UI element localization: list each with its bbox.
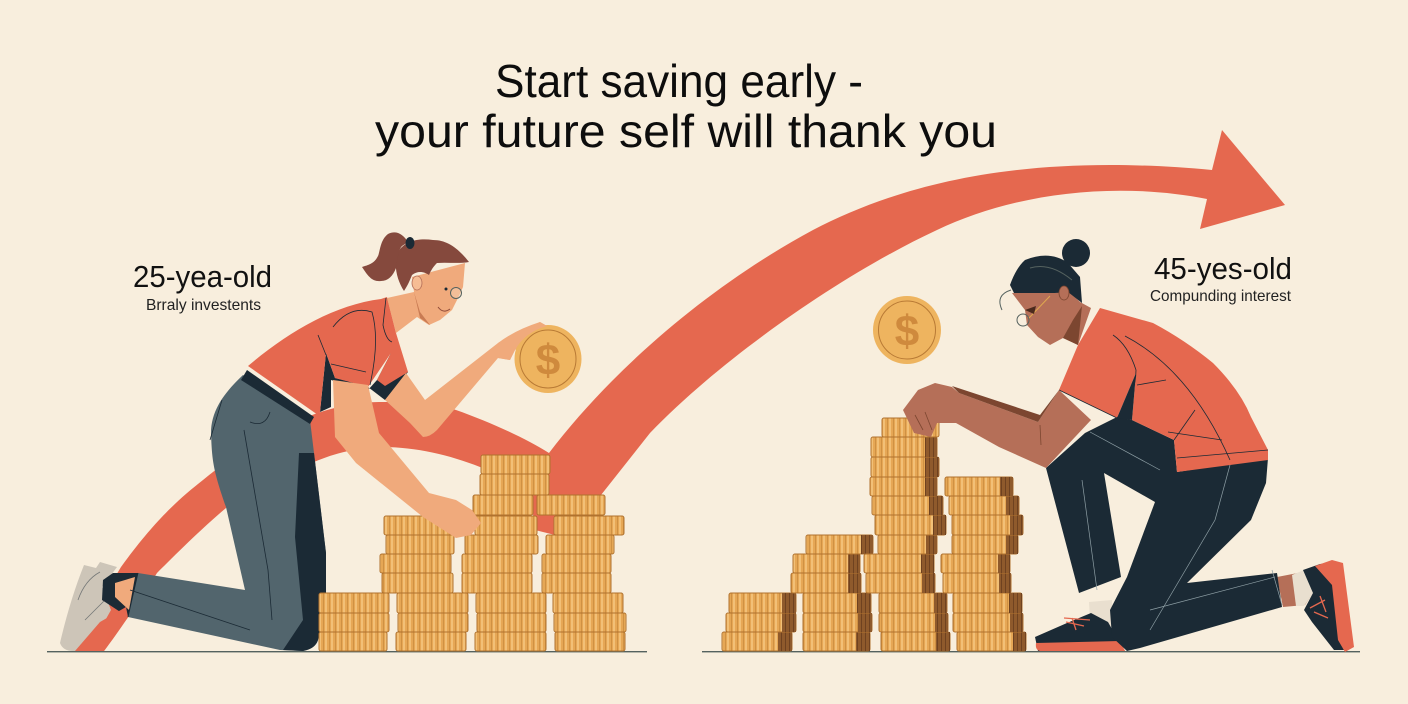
- ground line right: [702, 651, 1360, 652]
- coin stacks right: [722, 418, 1026, 651]
- arm and hands: [903, 383, 1091, 468]
- label: 45-year-old: 45-yes-old: [1154, 251, 1292, 286]
- belt: [241, 370, 314, 424]
- back shoe: [60, 562, 138, 651]
- head: [362, 232, 469, 333]
- jeans: [128, 375, 326, 651]
- ground line left: [47, 651, 647, 652]
- growth arrow: [75, 130, 1285, 651]
- coin held by young saver: [514, 325, 582, 393]
- shirt: [248, 297, 408, 415]
- label: 25-year-old: 25-yea-old: [133, 259, 272, 294]
- coin held by young saver: $: [536, 336, 560, 385]
- trousers: [1046, 417, 1282, 651]
- head: [1000, 239, 1091, 345]
- label: 45-year-old: Compunding interest: [1150, 288, 1292, 305]
- front shoe and sock: [1035, 600, 1125, 651]
- fingers on coin: [498, 322, 547, 360]
- label: 25-year-old: [133, 259, 272, 314]
- young saver figure: [60, 232, 547, 651]
- shirt: [1059, 308, 1268, 472]
- front arm young saver: [333, 380, 481, 538]
- older saver figure: [903, 239, 1354, 652]
- floating coin: [873, 296, 941, 364]
- title: your future self will thank you: [375, 105, 997, 157]
- coin stacks left: [319, 455, 626, 651]
- title: [375, 55, 997, 157]
- floating coin: $: [895, 307, 919, 356]
- back foot: [1277, 560, 1354, 652]
- label: 45-year-old: [1150, 251, 1292, 305]
- title: Start saving early -: [495, 55, 863, 107]
- back arm with hand: [385, 322, 547, 437]
- label: 25-year-old: Brraly investents: [146, 297, 261, 314]
